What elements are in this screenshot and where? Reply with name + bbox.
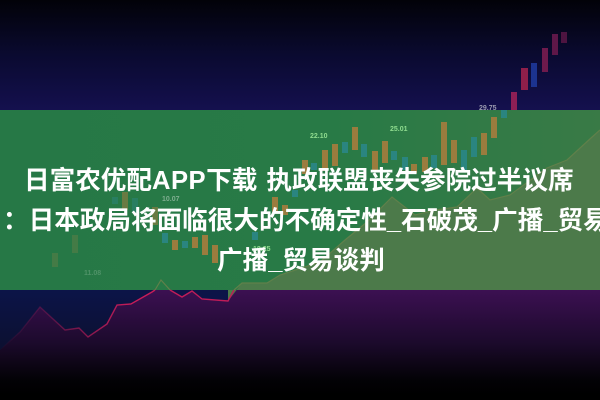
background: dark navy upper gradient — [0, 0, 600, 110]
title line 3: 广播_贸易谈判 — [217, 247, 385, 275]
price labels — [84, 105, 497, 277]
background: purple lower gradient — [0, 290, 600, 400]
price labels: 25.01 — [390, 126, 408, 133]
candlesticks above the band — [511, 32, 567, 112]
price labels: 29.75 — [479, 105, 497, 112]
title line 2: ：日本政局将面临很大的不确定性_石破茂_广播_贸易 — [3, 207, 600, 235]
area chart: mountain in band — [228, 130, 600, 301]
price labels: 18.25 — [253, 246, 271, 253]
price labels: 11.08 — [84, 270, 101, 277]
price labels: 22.10 — [310, 133, 328, 140]
title line 1: 日富农优配APP下载 执政联盟丧失参院过半议席 — [24, 167, 574, 195]
price labels: 10.07 — [162, 196, 180, 203]
candlesticks inside the band — [52, 110, 507, 267]
area chart: lower line — [0, 130, 600, 350]
green band — [0, 110, 600, 290]
